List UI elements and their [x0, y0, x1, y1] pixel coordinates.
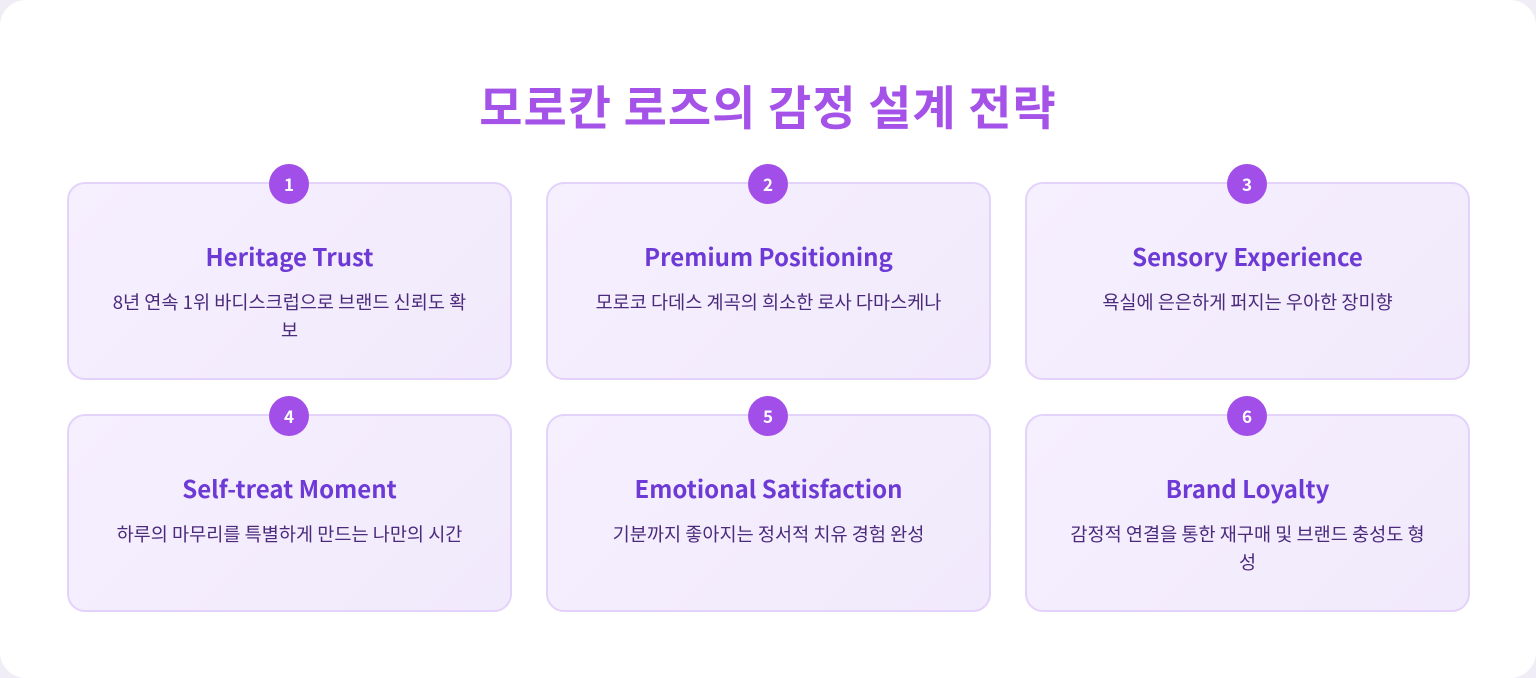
badge 1: 1 [284, 171, 294, 196]
text 1: 8년 연속 1위 바디스크럽으로 브랜드 신뢰도 확 [113, 288, 466, 315]
heading 1: Heritage Trust [206, 238, 373, 273]
card 5 [546, 414, 991, 612]
text 2: 모로코 다데스 계곡의 희소한 로사 다마스케나 [596, 288, 941, 315]
heading 3: Sensory Experience [1132, 238, 1363, 273]
text 6 [1070, 520, 1425, 575]
heading 6: Brand Loyalty [1166, 470, 1329, 505]
card 1 [67, 182, 512, 380]
badge 5: 5 [763, 403, 773, 428]
heading 2: Premium Positioning [644, 238, 893, 273]
badge 4: 4 [284, 403, 294, 428]
card 3 [1025, 182, 1470, 380]
text 3: 욕실에 은은하게 퍼지는 우아한 장미향 [1102, 288, 1393, 315]
badge 1 [269, 164, 309, 204]
text 1: 보 [281, 316, 298, 343]
heading 4: Self-treat Moment [182, 470, 397, 505]
card 4 [67, 414, 512, 612]
badge 6 [1227, 396, 1267, 436]
text 5: 기분까지 좋아지는 정서적 치유 경험 완성 [613, 520, 924, 547]
text 4: 하루의 마무리를 특별하게 만드는 나만의 시간 [117, 520, 462, 547]
badge 2: 2 [763, 171, 773, 196]
title: 모로칸 로즈의 감정 설계 전략 [479, 70, 1057, 139]
badge 6: 6 [1242, 403, 1252, 428]
card 6 [1025, 414, 1470, 612]
badge 3: 3 [1242, 171, 1252, 196]
badge 3 [1227, 164, 1267, 204]
badge 5 [748, 396, 788, 436]
badge 2 [748, 164, 788, 204]
card 2 [546, 182, 991, 380]
heading 5: Emotional Satisfaction [635, 470, 902, 505]
text 6: 성 [1239, 548, 1256, 575]
text 1 [113, 288, 466, 343]
badge 4 [269, 396, 309, 436]
text 6: 감정적 연결을 통한 재구매 및 브랜드 충성도 형 [1070, 520, 1425, 547]
